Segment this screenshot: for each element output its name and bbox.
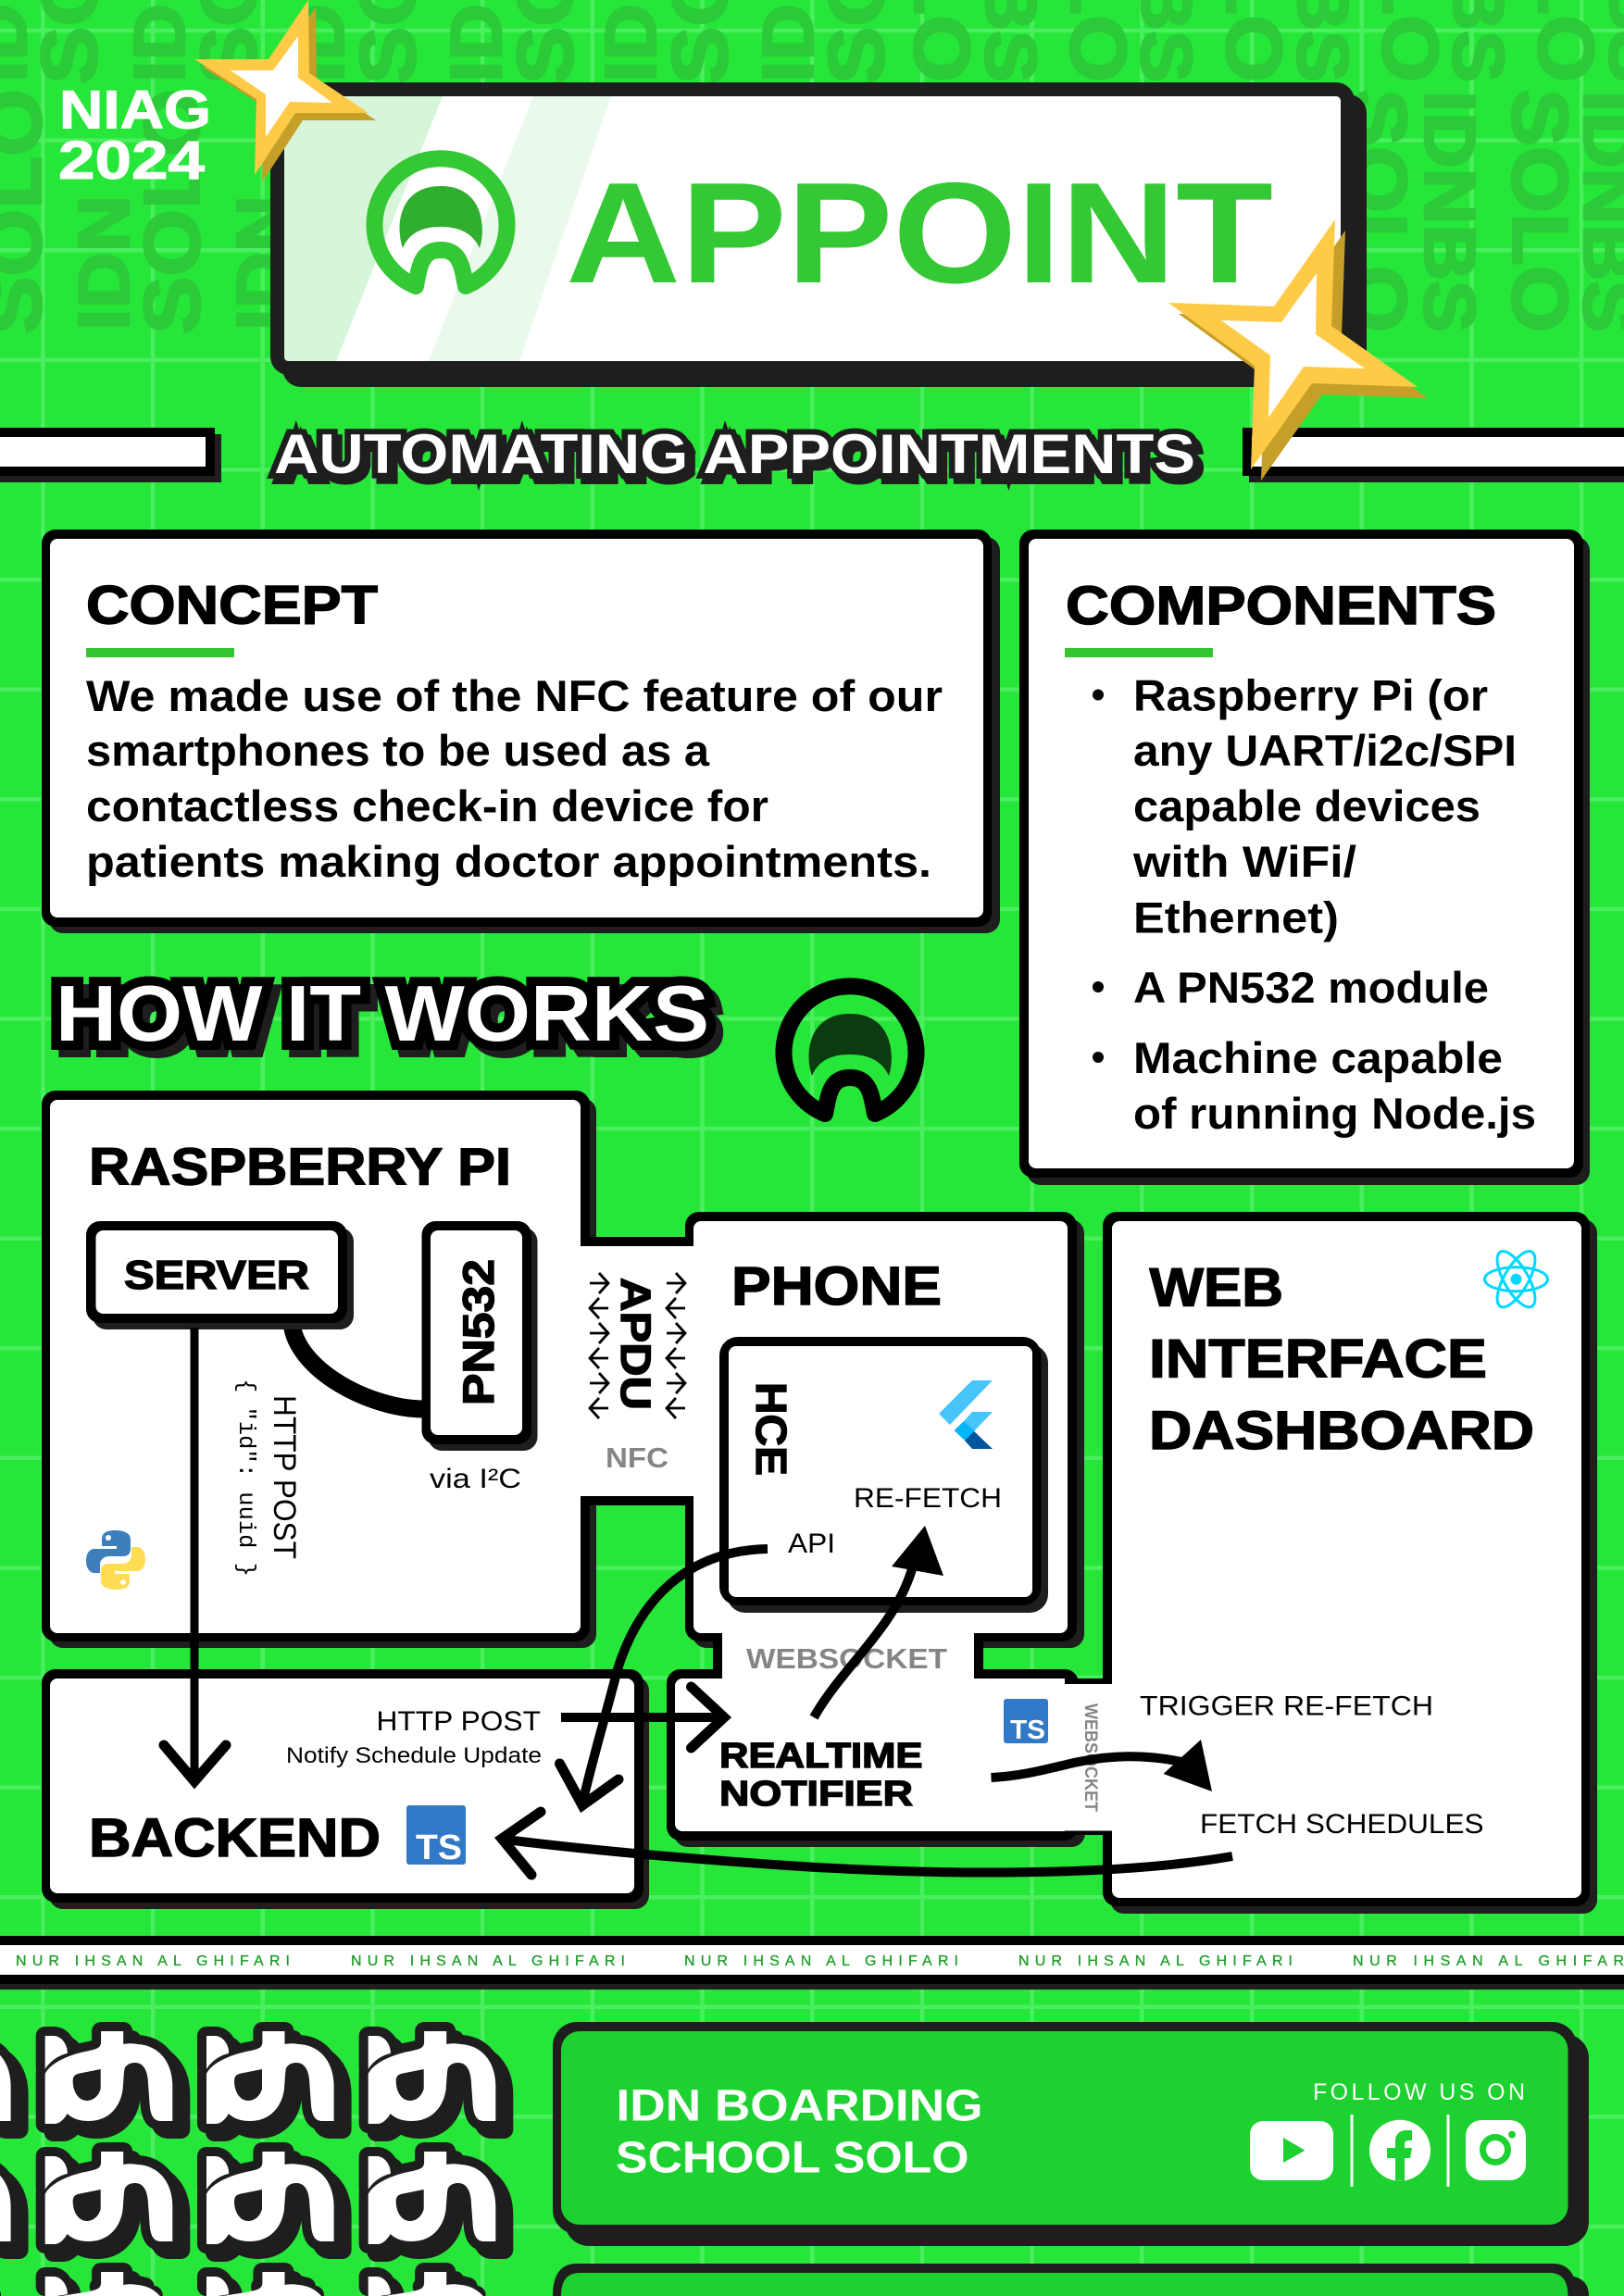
- label: websocket vertical: WEBSOCKET: [1081, 1703, 1100, 1812]
- arrow: backend http post to notifier: [561, 1687, 724, 1748]
- icon: youtube: [1250, 2121, 1333, 2180]
- background lettering: IDN: [221, 195, 303, 331]
- label: notify schedule update: Notify Schedule Update: [286, 1743, 542, 1768]
- icon: appoint logo: [374, 158, 507, 286]
- heading: realtime notifier: NOTIFIER: [719, 1775, 913, 1814]
- arrow: notifier to trigger re-fetch: [991, 1740, 1212, 1791]
- list of components: A PN532 module: [1133, 963, 1489, 1012]
- heading: web interface dashboard: WEB: [1150, 1257, 1283, 1318]
- list of components: Raspberry Pi (or: [1133, 670, 1488, 720]
- label: http post backend: HTTP POST: [376, 1706, 541, 1737]
- panel: backend: [42, 1669, 649, 1909]
- ribbon: author credits: NUR IHSAN AL GHIFARI: [351, 1953, 625, 1969]
- text: school name: IDN BOARDING: [617, 2081, 983, 2131]
- icon: facebook: [1369, 2120, 1430, 2181]
- heading: concept: CONCEPT: [86, 576, 378, 635]
- ribbon: author credits: NUR IHSAN AL GHIFARI: [16, 1953, 290, 1969]
- label: APDU: APDU: [612, 1278, 659, 1410]
- text: school name: SCHOOL SOLO: [616, 2133, 968, 2183]
- list of components: Ethernet): [1133, 892, 1339, 942]
- box: PN532: [422, 1221, 537, 1451]
- icon: typescript small: TS: [1010, 1716, 1045, 1745]
- ribbon: author credits: [0, 1936, 1624, 1990]
- heading: components: COMPONENTS: [1066, 576, 1496, 636]
- box: HCE: HCE: [747, 1382, 795, 1476]
- box: PN532: PN532: [454, 1259, 503, 1405]
- heading: phone: PHONE: [731, 1256, 942, 1316]
- panel: raspberry pi: [42, 1091, 596, 1648]
- ribbon: author credits: NUR IHSAN AL GHIFARI: [1018, 1953, 1293, 1969]
- icon: flutter: [939, 1380, 993, 1449]
- panel: concept: [42, 530, 1000, 933]
- text block: concept description: contactless check-in device for: [86, 781, 768, 830]
- panel: components: [1019, 530, 1590, 1185]
- label: NFC: NFC: [606, 1441, 668, 1474]
- background lettering: SOLO: [1334, 89, 1422, 332]
- icon: apdu arrows right column: [667, 1273, 685, 1418]
- panel: footer school card: [553, 2022, 1589, 2246]
- icon: typescript large: TS: [416, 1828, 462, 1867]
- list of components: [1132, 670, 1536, 1138]
- label: json payload: { "id": uuid }: [232, 1379, 259, 1577]
- list of components: Machine capable: [1133, 1033, 1503, 1082]
- heading: how it works: HOW IT WORKS: [56, 970, 709, 1058]
- label: trigger re-fetch: TRIGGER RE-FETCH: [1140, 1691, 1433, 1722]
- bullets: [1093, 689, 1104, 1063]
- pattern: logo tiles: [0, 2031, 495, 2296]
- subtitle: AUTOMATING APPOINTMENTS: [274, 423, 1195, 485]
- icon: python: [86, 1530, 145, 1590]
- icon: star bottom right: [1168, 219, 1428, 480]
- connector: websocket between phone and notifier: [713, 1628, 983, 1683]
- icon: react: [1485, 1246, 1548, 1313]
- icon: star top left: [194, 0, 376, 182]
- heading: backend: BACKEND: [89, 1808, 381, 1868]
- list of components: of running Node.js: [1133, 1089, 1536, 1138]
- divider: [1350, 2115, 1354, 2187]
- left ribbon bar: [0, 428, 221, 482]
- box: server: SERVER: [124, 1253, 309, 1298]
- right ribbon bar: [1243, 428, 1624, 482]
- text block: concept description: We made use of the NFC feature of our: [86, 671, 943, 720]
- list of components: any UART/i2c/SPI: [1133, 726, 1517, 775]
- icon: apdu arrows left column: [590, 1273, 608, 1418]
- panel: realtime notifier: [667, 1669, 1085, 1847]
- heading: web interface dashboard: DASHBOARD: [1149, 1401, 1534, 1461]
- background lettering: IDN: [63, 195, 144, 331]
- heading: raspberry pi: RASPBERRY PI: [89, 1137, 511, 1196]
- label: via I2C: via I²C: [430, 1464, 521, 1494]
- heading underline: [1065, 648, 1213, 657]
- divider: [1446, 2115, 1450, 2187]
- label: http post: HTTP POST: [267, 1395, 302, 1559]
- icon: typescript small: [1004, 1699, 1048, 1745]
- ribbon: author credits: NUR IHSAN AL GHIFAR: [1353, 1953, 1624, 1969]
- list of components: capable devices: [1133, 781, 1480, 830]
- panel: title banner: [270, 82, 1367, 387]
- box: server: [86, 1221, 354, 1329]
- background lettering: [0, 0, 1624, 334]
- event label: NIAG 2024: NIAG: [59, 80, 211, 141]
- text block: concept description: smartphones to be used as a: [86, 726, 710, 775]
- label: re-fetch: RE-FETCH: [854, 1483, 1002, 1514]
- connector: websocket between notifier and web: [1065, 1678, 1116, 1835]
- event label: NIAG 2024: [58, 80, 211, 191]
- label: fetch schedules: FETCH SCHEDULES: [1200, 1809, 1483, 1840]
- title: APPOINT: [566, 153, 1273, 313]
- icon: instagram: [1466, 2120, 1526, 2180]
- label: websocket horizontal: WEBSOCKET: [746, 1642, 947, 1675]
- heading: realtime notifier: [719, 1737, 922, 1814]
- list of components: with WiFi/: [1132, 837, 1356, 886]
- text: follow us on: FOLLOW US ON: [1313, 2079, 1525, 2105]
- heading: web interface dashboard: INTERFACE: [1149, 1329, 1487, 1389]
- box: HCE: [719, 1337, 1048, 1613]
- heading underline: [86, 648, 234, 657]
- arrow: server to backend: [164, 1328, 226, 1781]
- background lettering: SOLO: [129, 89, 217, 334]
- heading: realtime notifier: REALTIME: [719, 1737, 922, 1776]
- panel: web interface dashboard: [1103, 1212, 1597, 1914]
- event label: NIAG 2024: 2024: [58, 131, 205, 191]
- panel: phone: [685, 1212, 1084, 1648]
- label: api: API: [788, 1529, 835, 1559]
- cable: server to PN532: [292, 1323, 424, 1409]
- ribbon: author credits: NUR IHSAN AL GHIFARI: [684, 1953, 958, 1969]
- connector: NFC link: [574, 1237, 699, 1505]
- arrow: fetch schedules to backend: [502, 1812, 1232, 1875]
- text: school name: [616, 2081, 983, 2183]
- icon: typescript large: [406, 1805, 466, 1867]
- text block: concept description: [86, 671, 943, 886]
- text block: concept description: patients making doctor appointments.: [86, 837, 931, 886]
- arrow: api to backend: [559, 1549, 768, 1805]
- background lettering: SOLO: [1495, 89, 1583, 332]
- panel: footer second card: [553, 2264, 1589, 2296]
- icon: black logo: [783, 986, 917, 1114]
- heading: web interface dashboard: [1149, 1257, 1534, 1461]
- background lettering: IDNBS: [1409, 91, 1491, 332]
- arrow: notifier to re-fetch: [814, 1526, 943, 1717]
